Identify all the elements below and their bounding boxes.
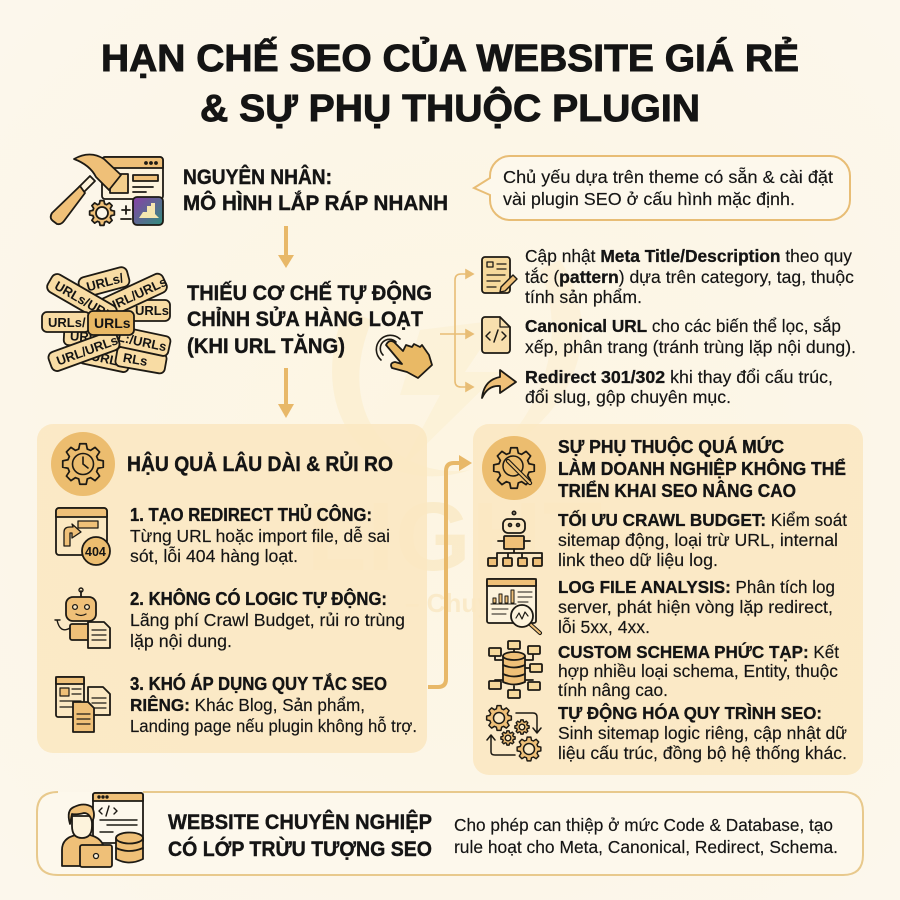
text: no automated logic: 2. KHÔNG CÓ LOGIC TỰ ĐỘNG: <box>130 588 387 609</box>
text: crawl budget: link theo dữ liệu log. <box>558 550 718 570</box>
heading: professional website: CÓ LỚP TRỪU TƯỢNG SEO <box>168 837 432 861</box>
text: hard to apply rules: RIÊNG: Khác Blog, Sản phẩm, <box>130 694 365 715</box>
heading: missing bulk editing mechanism: (KHI URL TĂNG) <box>187 335 345 358</box>
text: log file analysis: lỗi 5xx, 4xx. <box>558 616 650 637</box>
icon: wrench gear <box>482 436 546 500</box>
arrow: cause to missing mechanism <box>278 226 294 268</box>
text: hard to apply rules: 3. KHÓ ÁP DỤNG QUY TẮC SEO <box>130 673 387 694</box>
text: no automated logic: lặp nội dung. <box>130 631 232 651</box>
panel: long-term consequences <box>37 424 427 753</box>
icon: pile of URL tags: URL/URLs <box>105 274 169 315</box>
icon: log analysis <box>487 579 540 633</box>
icon: pile of URL tags: URLs <box>135 303 169 318</box>
text: crawl budget: TỐI ƯU CRAWL BUDGET: Kiểm soát <box>558 509 847 530</box>
text: SEO automation: liệu cấu trúc, đồng bộ hệ thống khác. <box>558 743 847 763</box>
text: meta rule: tắc (pattern) dựa trên category, tag, thuộc <box>525 266 854 287</box>
heading: missing bulk editing mechanism: THIẾU CƠ CHẾ TỰ ĐỘNG <box>187 281 432 305</box>
icon: robot with document <box>55 588 110 648</box>
icon: pile of URL tags: URL/URLs <box>54 332 120 368</box>
panel: over-dependence <box>473 424 863 775</box>
text: manual redirects: sót, lỗi 404 hàng loạt. <box>130 545 298 566</box>
text: redirect: đổi slug, gộp chuyên mục. <box>525 387 731 407</box>
icon: redirect 404 window: 404 <box>85 545 106 559</box>
panel heading: HẬU QUẢ LÂU DÀI & RỦI RO <box>127 452 393 476</box>
panel heading: LÀM DOANH NGHIỆP KHÔNG THỂ <box>558 458 846 479</box>
heading: professional website <box>168 810 432 861</box>
text: crawl budget <box>558 509 847 570</box>
icon: redirect 404 window <box>56 508 110 565</box>
icon: page templates <box>56 677 110 732</box>
title: & SỰ PHỤ THUỘC PLUGIN <box>200 85 700 130</box>
text: crawl budget: sitemap động, loại trừ URL, internal <box>558 530 838 550</box>
text: canonical URL: xếp, phân trang (tránh trùng lặp nội dung). <box>525 337 856 357</box>
watermark logo <box>307 260 602 618</box>
heading: professional website: WEBSITE CHUYÊN NGHIỆP <box>168 810 432 834</box>
watermark logo: – Chuyên <box>405 588 522 618</box>
icon: redirect arrow <box>482 370 516 398</box>
icon: pile of URL tags: URLs/ <box>85 270 125 294</box>
panel heading <box>558 436 846 501</box>
arrow: consequences to dependence panel <box>428 455 472 687</box>
text: canonical URL <box>525 315 856 357</box>
icon: tapping hand <box>376 335 432 378</box>
text: manual redirects: Từng URL hoặc import file, dễ sai <box>130 525 390 546</box>
heading: missing bulk editing mechanism: CHỈNH SỬA HÀNG LOẠT <box>187 307 423 331</box>
icon: pile of URL tags: URLs/ <box>48 315 86 330</box>
text: manual redirects: 1. TẠO REDIRECT THỦ CÔNG: <box>130 504 372 525</box>
panel heading: SỰ PHỤ THUỘC QUÁ MỨC <box>558 436 784 457</box>
text: meta rule: tính sản phẩm. <box>525 287 642 307</box>
icon: pile of URL tags: URLs <box>94 315 131 331</box>
text: professional website detail <box>454 815 838 857</box>
text: redirect <box>525 367 833 407</box>
title <box>101 36 799 130</box>
icon: pile of URL tags <box>42 266 171 374</box>
text: redirect: Redirect 301/302 khi thay đổi cấu trúc, <box>525 367 833 387</box>
text: hard to apply rules <box>130 673 417 736</box>
text: no automated logic: Lãng phí Crawl Budget, rủi ro trùng <box>130 610 405 630</box>
text: canonical URL: Canonical URL cho các biến thể lọc, sắp <box>525 315 841 336</box>
text: meta rule <box>525 246 854 307</box>
icon: automation gears <box>487 706 541 761</box>
icon: database schema <box>489 641 542 698</box>
text: custom schema: CUSTOM SCHEMA PHỨC TẠP: Kết <box>558 641 839 662</box>
arrow: to consequences panel <box>278 368 294 418</box>
icon: hammer, website, gear and plugin <box>51 154 163 225</box>
icon: meta document with pencil <box>482 257 517 293</box>
panel: professional website <box>37 792 863 875</box>
icon: pile of URL tags: URLs <box>90 348 126 370</box>
text: SEO automation: TỰ ĐỘNG HÓA QUY TRÌNH SEO: <box>558 702 822 723</box>
text: hard to apply rules: Landing page nếu plugin không hỗ trợ. <box>130 715 417 736</box>
heading: missing bulk editing mechanism <box>187 281 432 358</box>
heading: cause: MÔ HÌNH LẮP RÁP NHANH <box>183 191 448 215</box>
heading: cause <box>183 165 448 215</box>
text: log file analysis <box>558 577 835 637</box>
icon: pile of URL tags: URL <box>70 328 97 345</box>
text: professional website detail: Cho phép can thiệp ở mức Code & Database, tạo <box>454 815 833 835</box>
callout: cause detail <box>474 156 850 220</box>
text: custom schema: tính nâng cao. <box>558 680 668 700</box>
callout: cause detail: Chủ yếu dựa trên theme có sẵn & cài đặt <box>503 167 833 187</box>
text: professional website detail: rule hoạt cho Meta, Canonical, Redirect, Schema. <box>454 837 838 857</box>
connector: bracket to three fixes <box>440 270 473 391</box>
icon: pile of URL tags: URLs/URL <box>52 278 115 323</box>
text: custom schema <box>558 641 839 700</box>
icon: robot with sitemap tree <box>488 511 542 566</box>
text: log file analysis: server, phát hiện vòng lặp redirect, <box>558 597 833 617</box>
watermark logo: LIGHT <box>307 482 602 591</box>
panel heading: TRIỂN KHAI SEO NÂNG CAO <box>558 480 796 501</box>
callout: cause detail: vài plugin SEO ở cấu hình mặc định. <box>503 189 795 209</box>
text: SEO automation <box>558 702 847 763</box>
text: meta rule: Cập nhật Meta Title/Description theo quy <box>525 246 852 266</box>
icon: pile of URL tags: RL:/URLs <box>107 327 168 354</box>
text: manual redirects <box>130 504 390 566</box>
title: HẠN CHẾ SEO CỦA WEBSITE GIÁ RẺ <box>101 36 799 80</box>
heading: cause: NGUYÊN NHÂN: <box>183 165 332 189</box>
icon: clock gear <box>51 432 115 496</box>
icon: pile of URL tags: RLs <box>122 350 149 369</box>
text: log file analysis: LOG FILE ANALYSIS: Phân tích log <box>558 577 835 597</box>
text: no automated logic <box>130 588 405 651</box>
icon: code file <box>482 317 510 353</box>
text: custom schema: hợp nhiều loại schema, Entity, thuộc <box>558 661 838 681</box>
text: SEO automation: Sinh sitemap logic riêng, cập nhật dữ <box>558 723 847 743</box>
icon: developer with code and database <box>62 793 143 867</box>
